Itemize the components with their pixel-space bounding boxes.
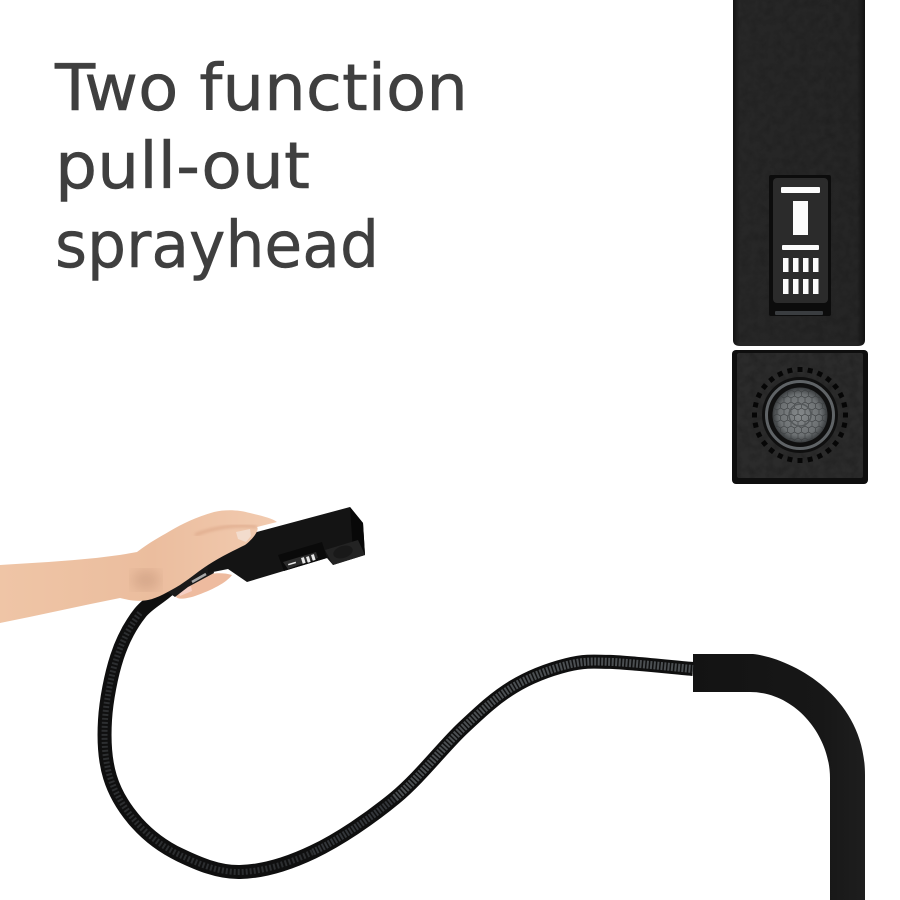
title <box>54 52 468 283</box>
hose ferrule <box>162 556 214 597</box>
title: Two function <box>54 52 468 126</box>
fingers under the sprayhead <box>176 573 232 599</box>
toggle switch <box>769 175 831 316</box>
spray face <box>732 350 868 484</box>
braided hose <box>105 586 693 872</box>
title: pull-out <box>55 130 310 204</box>
aerator nozzle <box>762 377 838 453</box>
sprayhead close-up <box>732 0 868 484</box>
sprayhead body <box>733 0 865 346</box>
wrist shadow <box>132 570 160 590</box>
spout <box>693 654 865 900</box>
crease between finger and thumb <box>195 526 257 535</box>
outlet dots ring <box>752 367 848 463</box>
sprayhead switch <box>283 552 318 569</box>
sprayhead held in hand <box>207 507 365 582</box>
thumb nail <box>236 529 251 542</box>
title: sprayhead <box>55 209 379 283</box>
sprayhead recess <box>278 542 327 571</box>
sprayhead top and front <box>207 507 365 582</box>
sprayhead nozzle face <box>325 540 365 565</box>
hand and arm <box>0 510 277 623</box>
